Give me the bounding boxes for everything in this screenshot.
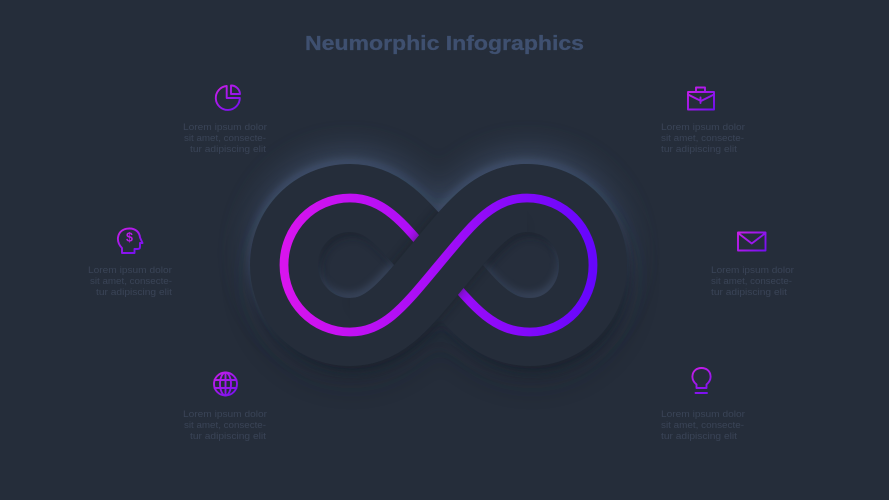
text block: tur adipiscing elit (661, 431, 738, 441)
text block (711, 265, 794, 297)
text block: Lorem ipsum dolor (88, 265, 172, 275)
text block: Lorem ipsum dolor (183, 409, 267, 419)
icon: head with dollar (118, 228, 142, 253)
text block: Lorem ipsum dolor (661, 409, 745, 419)
text block: Lorem ipsum dolor (711, 265, 794, 275)
item: bottom right (661, 368, 745, 441)
title: Neumorphic Infographics (305, 33, 584, 55)
text block: sit amet, consecte- (661, 420, 744, 430)
icon: briefcase (688, 88, 714, 110)
neon line: under strand (284, 198, 593, 332)
text block: sit amet, consecte- (184, 133, 266, 143)
text block: sit amet, consecte- (90, 276, 172, 286)
text block (183, 122, 267, 154)
item: bottom left (183, 372, 267, 441)
infinity diagram (283, 186, 596, 345)
item: top left (183, 85, 267, 154)
text block: tur adipiscing elit (711, 287, 788, 297)
crossing shadow (408, 230, 469, 300)
text block: sit amet, consecte- (711, 276, 792, 286)
text block (661, 409, 745, 441)
shadow: dark neumorphic drop shadow (286, 211, 595, 345)
text block: tur adipiscing elit (190, 431, 267, 441)
text block (183, 409, 267, 441)
band: infinity ribbon (284, 198, 593, 332)
neon line: over strand (350, 198, 527, 332)
text block (661, 122, 745, 154)
icon: light bulb (692, 368, 711, 393)
item: top right (661, 88, 745, 154)
text block: sit amet, consecte- (184, 420, 266, 430)
glow: light neumorphic highlight (284, 186, 593, 320)
icon: globe (214, 372, 237, 396)
item: middle right (711, 232, 794, 297)
icon: dollar sign: $ (126, 230, 133, 244)
text block: tur adipiscing elit (190, 144, 267, 154)
text block: tur adipiscing elit (661, 144, 738, 154)
soft edge light (283, 193, 592, 327)
text block: Lorem ipsum dolor (183, 122, 267, 132)
item: middle left (88, 228, 173, 297)
soft edge shadow (287, 203, 596, 337)
text block: sit amet, consecte- (661, 133, 744, 143)
holes: inner cut-outs of the loops (312, 226, 566, 304)
icon: pie chart (216, 85, 240, 110)
icon: envelope (738, 232, 766, 250)
text block (88, 265, 173, 297)
band: over strand (350, 198, 527, 332)
text block: tur adipiscing elit (96, 287, 173, 297)
text block: Lorem ipsum dolor (661, 122, 745, 132)
